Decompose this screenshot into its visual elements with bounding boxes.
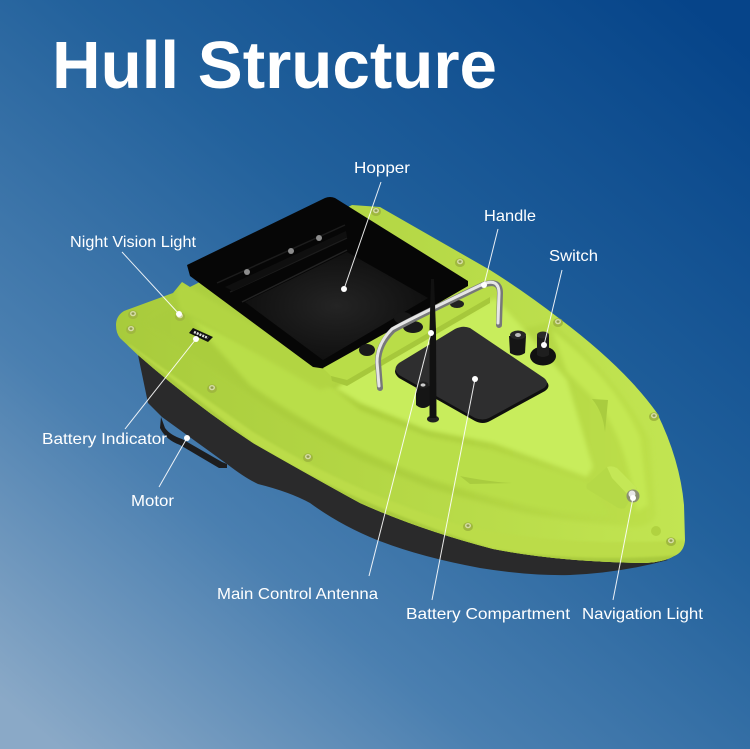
- label: Battery Compartment: Battery Compartment: [406, 606, 571, 623]
- bow side slope: [555, 335, 646, 508]
- label: Motor: Motor: [131, 493, 175, 510]
- groove recess: [360, 326, 639, 514]
- black lower hull: [138, 355, 668, 575]
- label: Night Vision Light: Night Vision Light: [70, 234, 197, 251]
- raised strip beside hopper: [177, 282, 322, 386]
- leader dots: [176, 282, 636, 501]
- nose mount: [586, 466, 640, 509]
- label: Hopper: Hopper: [354, 160, 411, 177]
- label: Battery Indicator: Battery Indicator: [42, 431, 168, 448]
- handle: [377, 282, 500, 388]
- mid band: [196, 322, 505, 497]
- hull decals: [592, 399, 608, 432]
- boat illustration: [110, 197, 690, 575]
- knob by antenna: [416, 382, 430, 408]
- label: Handle: Handle: [484, 208, 536, 225]
- lime hull deck: [110, 205, 690, 570]
- hatch screws: [359, 300, 464, 356]
- motor bracket: [160, 417, 227, 468]
- label: Switch: Switch: [549, 248, 598, 265]
- lime plate in front of hopper: [323, 270, 492, 380]
- switch: [530, 332, 556, 366]
- power knob: [509, 330, 526, 356]
- raised bright deck: [335, 298, 593, 477]
- battery compartment lid: [395, 327, 548, 423]
- leader lines: [122, 182, 633, 600]
- title: Hull Structure: [52, 28, 497, 103]
- battery indicator display: [189, 328, 213, 342]
- main control antenna: [427, 279, 439, 422]
- lower lip band: [110, 345, 690, 570]
- label: Main Control Antenna: Main Control Antenna: [217, 586, 378, 603]
- hopper: [187, 197, 468, 368]
- hull bolts: [126, 207, 676, 546]
- label: Navigation Light: Navigation Light: [582, 606, 704, 623]
